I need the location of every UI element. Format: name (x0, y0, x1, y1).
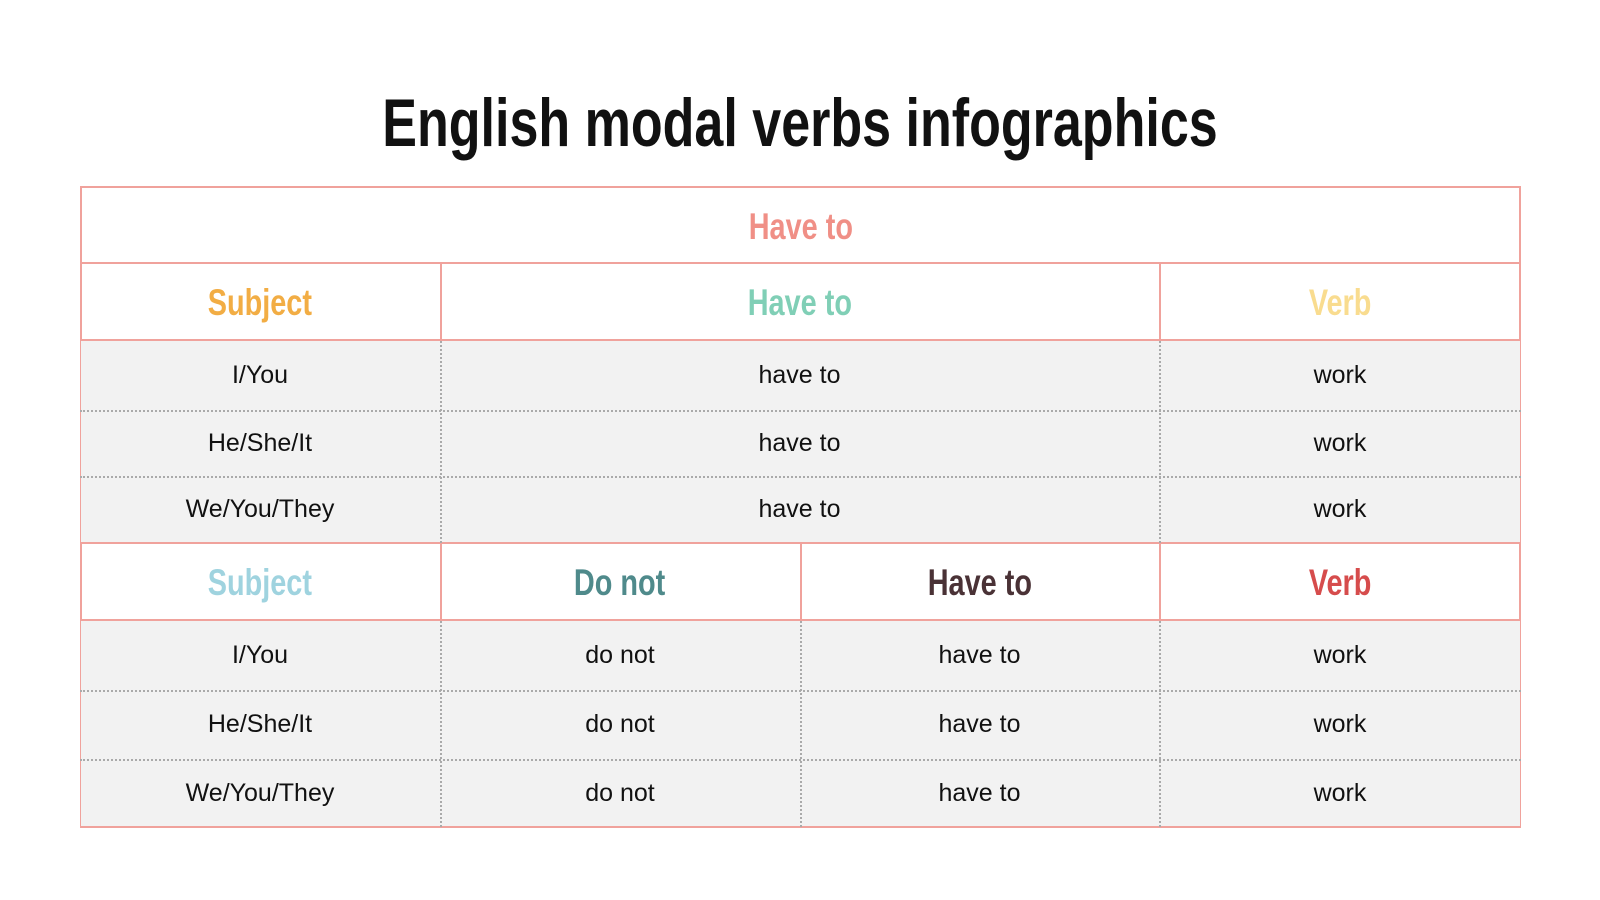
rows table 1: work (1314, 495, 1366, 523)
rows table 1: work (1314, 428, 1366, 456)
rows table 1: have to (758, 428, 840, 456)
rows table 2: I/You (232, 641, 288, 669)
header row 2 (208, 562, 1371, 603)
header row 2: Do not (574, 562, 666, 603)
rows table 2: We/You/They (186, 778, 334, 806)
rows table 1: have to (758, 495, 840, 523)
title: English modal verbs infographics (382, 85, 1218, 161)
rows table 2: have to (938, 710, 1020, 738)
rows table 2: work (1314, 778, 1366, 806)
rows table 2: He/She/It (208, 710, 312, 738)
rows table 2 (186, 641, 1366, 806)
rows table 1: I/You (232, 361, 288, 389)
header row 1 (208, 282, 1371, 323)
header row 2: Verb (1309, 562, 1371, 603)
rows table 2: do not (585, 710, 655, 738)
rows table 2: have to (938, 778, 1020, 806)
rows table 2: do not (585, 641, 655, 669)
rows table 2: have to (938, 641, 1020, 669)
header row 1: Verb (1309, 282, 1371, 323)
rows table 1: He/She/It (208, 428, 312, 456)
rows table 1: We/You/They (186, 495, 334, 523)
rows table 1: work (1314, 361, 1366, 389)
rows table 2: work (1314, 641, 1366, 669)
header row 1: Have to (747, 282, 852, 323)
rows table 1: have to (758, 361, 840, 389)
rows table 2: work (1314, 710, 1366, 738)
header row 1: Subject (208, 282, 312, 323)
header row 2: Subject (208, 562, 312, 603)
heading: Have to: Have to (748, 206, 853, 246)
table (80, 186, 1521, 828)
rows table 1 (186, 361, 1366, 523)
rows table 2: do not (585, 778, 655, 806)
header row 2: Have to (927, 562, 1032, 603)
